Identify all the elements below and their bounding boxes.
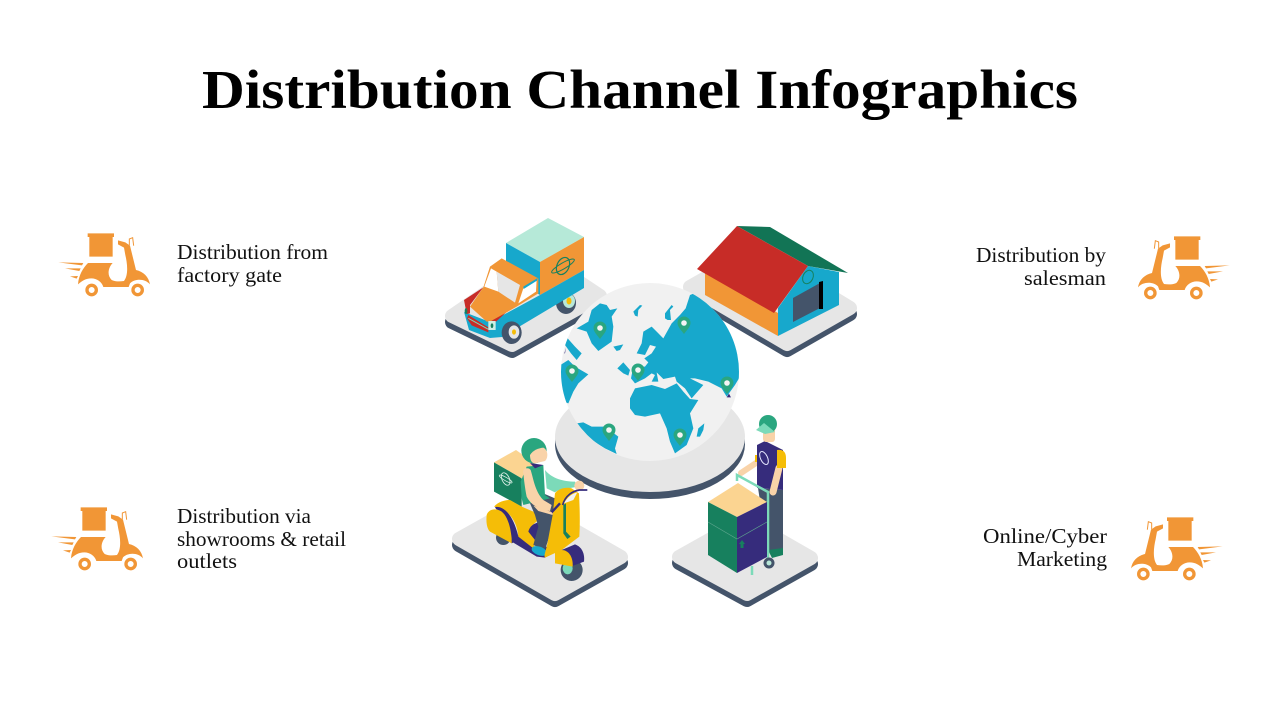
- continents: [561, 294, 739, 454]
- text: online cyber marketing: [983, 524, 1108, 571]
- illustration: truck on platform: [452, 218, 600, 351]
- icon: scooter bottom right: [1131, 517, 1223, 579]
- text: distribution from factory gate: factory gate: [177, 263, 282, 287]
- text: online cyber marketing: Online/Cyber: [983, 524, 1107, 548]
- text: distribution by salesman: [976, 243, 1107, 290]
- text: distribution from factory gate: Distribution from: [177, 240, 328, 264]
- illustration: globe on base: [555, 283, 762, 499]
- illustration: delivery man with cart: [679, 415, 811, 600]
- text: distribution via showrooms and retail outlets: [177, 504, 346, 573]
- illustration: warehouse on platform: [690, 226, 850, 350]
- truck cab: [464, 258, 538, 344]
- text: distribution via showrooms and retail outlets: outlets: [177, 549, 237, 573]
- title: Distribution Channel Infographics: [202, 59, 1078, 120]
- illustration: delivery rider on scooter: [459, 438, 621, 600]
- icon: scooter top right: [1138, 236, 1230, 298]
- text: distribution via showrooms and retail outlets: showrooms & retail: [177, 527, 346, 551]
- scooter and rider: [486, 438, 587, 581]
- text: distribution by salesman: salesman: [1024, 266, 1107, 290]
- icon: scooter top left: [58, 233, 150, 295]
- location pins: [566, 316, 734, 446]
- icon: scooter bottom left: [51, 507, 143, 569]
- text: online cyber marketing: Marketing: [1017, 547, 1108, 571]
- text: distribution from factory gate: [177, 240, 328, 287]
- text: distribution by salesman: Distribution by: [976, 243, 1106, 267]
- text: distribution via showrooms and retail outlets: Distribution via: [177, 504, 312, 528]
